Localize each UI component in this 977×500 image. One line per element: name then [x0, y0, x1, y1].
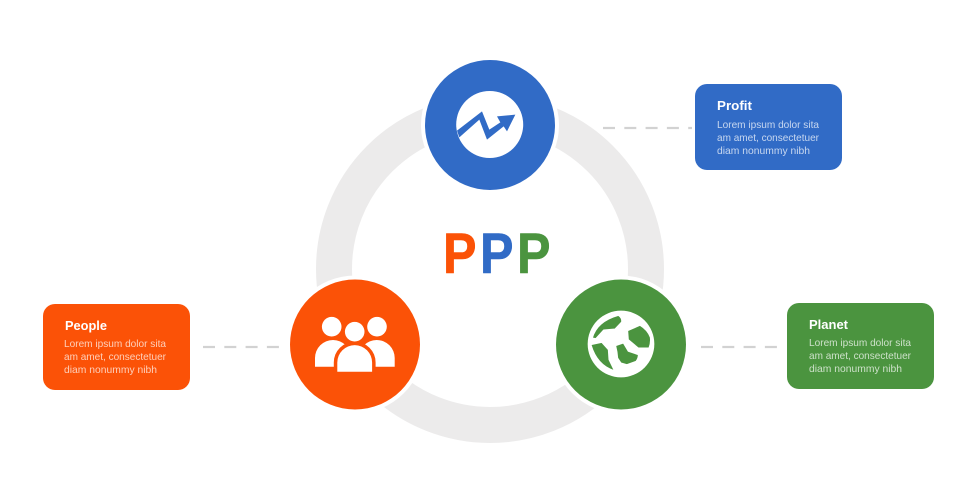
icon: growth arrow — [456, 91, 523, 158]
card: Planet: Planet — [809, 318, 849, 332]
node: People — [286, 276, 424, 414]
card: People: People — [65, 319, 107, 333]
card: Profit: Lorem ipsum dolor sita — [717, 119, 819, 131]
card: Profit: diam nonummy nibh — [717, 145, 810, 157]
card: Planet: am amet, consectetuer — [809, 350, 911, 362]
card: Planet — [787, 303, 934, 389]
card: Profit — [695, 84, 842, 170]
connector: People — [203, 346, 281, 348]
card: Profit: Profit — [717, 99, 753, 113]
centre title PPP: P — [480, 222, 514, 286]
node: Profit — [421, 56, 559, 194]
card: People — [43, 304, 190, 390]
connector: Planet — [701, 346, 778, 348]
card: Planet: diam nonummy nibh — [809, 363, 902, 375]
card: People: am amet, consectetuer — [64, 351, 166, 363]
icon: people group — [315, 317, 395, 372]
centre title PPP: P — [517, 222, 550, 286]
card: People: diam nonummy nibh — [64, 364, 157, 376]
icon: globe — [588, 311, 654, 377]
card: Planet: Lorem ipsum dolor sita — [809, 337, 911, 349]
centre title PPP: P — [443, 222, 476, 286]
connector: Profit — [603, 127, 692, 129]
card: Profit: am amet, consectetuer — [717, 132, 819, 144]
centre title PPP — [443, 222, 550, 286]
node: Planet — [552, 276, 690, 414]
card: People: Lorem ipsum dolor sita — [64, 338, 166, 350]
grey ring — [334, 113, 646, 425]
